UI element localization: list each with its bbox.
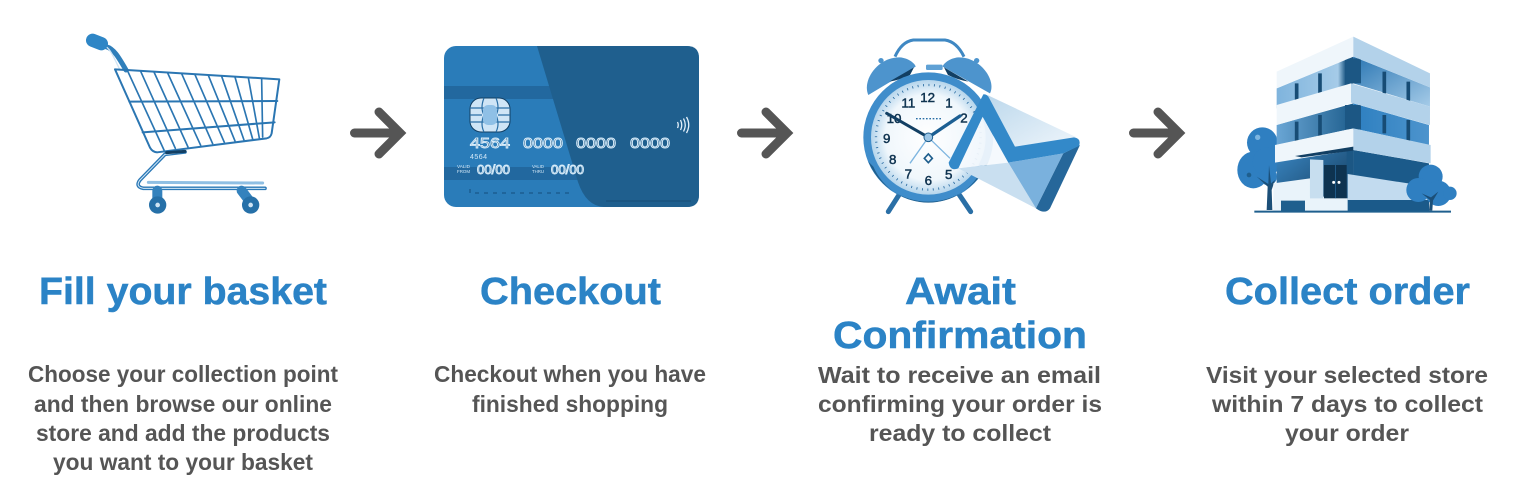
heading: Await Confirmation: Await (905, 271, 1016, 313)
clock: 6 (925, 173, 932, 188)
icon: alarm clock with envelope (863, 40, 1080, 212)
icon: credit card (444, 46, 699, 207)
clock: 2 (960, 110, 968, 125)
text block: collect order description: within 7 days to collect (1211, 391, 1483, 417)
door (1324, 165, 1347, 198)
text block: await confirmation description (818, 362, 1102, 446)
building body (1273, 37, 1431, 212)
clock: 7 (905, 166, 912, 181)
card number: 0000 (523, 135, 563, 152)
text block: fill your basket description: store and add the products (36, 420, 330, 446)
envelope (949, 94, 1080, 212)
heading: Collect order: Collect order (1225, 271, 1470, 313)
text block: await confirmation description: confirming your order is (818, 391, 1102, 417)
card details: FROM (457, 169, 470, 174)
card number: 0000 (576, 135, 616, 152)
clock: 8 (889, 152, 896, 167)
clock: 12 (920, 90, 935, 105)
text block: fill your basket description: Choose your collection point (28, 361, 338, 387)
clock: 9 (883, 131, 890, 146)
card details (457, 154, 545, 174)
card details: VALID (532, 164, 545, 169)
arrow 2 (742, 112, 787, 154)
clock: 5 (945, 167, 952, 182)
card number: 4564 (470, 135, 510, 152)
heading: Checkout: Checkout (480, 271, 661, 313)
heading: Fill your basket: Fill your basket (39, 271, 327, 313)
text block: collect order description: Visit your selected store (1206, 362, 1488, 388)
arrow 3 (1134, 112, 1179, 154)
text block: checkout description: finished shopping (472, 391, 668, 417)
clock: 10 (887, 111, 901, 126)
text block: await confirmation description: Wait to receive an email (818, 362, 1101, 388)
text block: fill your basket description: you want to your basket (53, 449, 313, 475)
clock: 1 (945, 95, 953, 110)
clock: 11 (901, 95, 915, 110)
right tree (1406, 165, 1457, 211)
heading: Await Confirmation (833, 271, 1087, 357)
icon: store building with trees (1237, 37, 1457, 212)
icon: shopping cart (93, 40, 279, 214)
heading: Await Confirmation: Confirmation (833, 315, 1087, 357)
text block: await confirmation description: ready to collect (869, 420, 1051, 446)
icon: credit card: 00/00 (551, 163, 584, 177)
contactless symbol (678, 117, 689, 133)
arrow 1 (354, 112, 400, 154)
text block: checkout description (434, 361, 706, 417)
card number: 0000 (630, 135, 670, 152)
text block: collect order description: your order (1285, 420, 1409, 446)
text block: collect order description (1206, 362, 1488, 446)
text block: fill your basket description (28, 361, 338, 475)
clock (863, 40, 993, 212)
icon: credit card: 00/00 (477, 163, 510, 177)
card details: 4564 (470, 154, 487, 161)
ground line (1254, 209, 1451, 215)
card chip (470, 98, 510, 132)
card details: THRU (532, 169, 544, 174)
text block: checkout description: Checkout when you have (434, 361, 706, 387)
text block: fill your basket description: and then browse our online (34, 391, 332, 417)
card number (470, 135, 670, 152)
card details: VALID (457, 164, 471, 169)
left tree (1237, 127, 1281, 210)
